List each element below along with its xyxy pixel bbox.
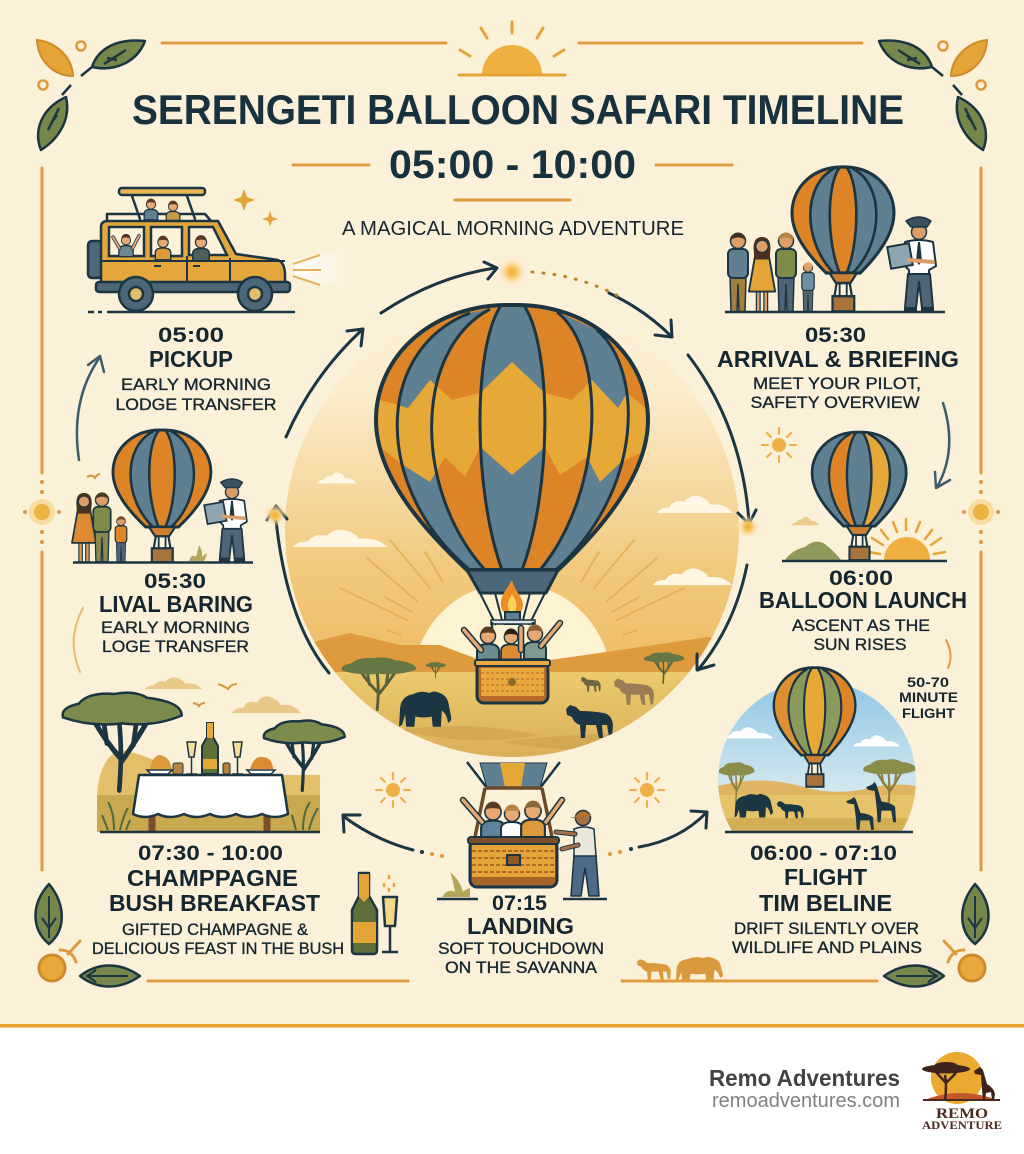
flight duration note: 50-70 [907,674,949,690]
corner ornament: bottom right [884,884,989,986]
sun [420,590,606,672]
balloon [113,428,215,562]
step text: 05:30 second briefing: 05:30 [144,570,206,593]
ground and grass [73,561,253,564]
roof canopy and rails [107,188,211,221]
bush [785,542,841,560]
step text: 07:15 landing: ON THE SAVANNA [445,958,598,977]
step text: 05:00 pickup: LODGE TRANSFER [116,395,276,414]
step text: champagne bush breakfast [92,842,344,958]
window passengers [113,234,209,261]
illustration: arrival and briefing [725,165,945,312]
grass [442,872,470,897]
sun rays [869,519,945,554]
step text: 05:00 pickup: PICKUP [149,346,233,372]
sky [718,680,916,795]
step text: champagne bush breakfast: 07:30 - 10:00 [138,842,283,865]
sky [285,360,739,672]
grass and ground line [100,831,320,833]
title: SERENGETI BALLOON SAFARI TIMELINE [132,86,904,133]
trees [719,759,917,805]
family group [72,492,127,562]
website: remoadventures.com [712,1090,900,1112]
step text: 07:15 landing: LANDING [467,913,574,939]
icon: champagne bottle and glass [352,873,398,954]
decorative frame: lines and dots [42,43,981,981]
footer band [0,1027,1024,1154]
icon: small sun left of landing [376,773,410,807]
wicker basket [475,660,550,703]
footer rule [0,1024,1024,1028]
road line [88,311,295,313]
step text: champagne bush breakfast: BUSH BREAKFAST [109,890,320,916]
step text: 05:30 second briefing: LOGE TRANSFER [102,637,249,656]
illustration: balloon launch [782,430,947,561]
small side arrows [77,356,950,488]
birds [193,684,237,706]
step text: 05:30 second briefing [99,570,253,656]
hills [718,780,916,800]
step text: champagne bush breakfast: DELICIOUS FEAST IN THE BUSH [92,939,344,958]
guests group [728,232,814,312]
passengers [463,800,562,839]
bumper [96,282,290,292]
jeep body [101,221,285,286]
clouds [722,727,900,746]
ground shadows [404,726,612,750]
central scene: balloon over the savanna [285,303,740,781]
step text: 05:30 arrival and briefing: ARRIVAL & BRIEFING [717,346,959,372]
balloon [812,430,910,560]
step text: champagne bush breakfast: GIFTED CHAMPAGNE & [122,920,309,939]
wheels [119,277,272,311]
step text: 06:00 balloon launch: ASCENT AS THE [792,616,930,635]
icon: small sun right of landing [630,773,664,807]
step text: 07:15 landing: SOFT TOUCHDOWN [438,939,604,958]
dotted connectors and glowing timeline markers [23,257,1000,858]
step text: 06:00 balloon launch: SUN RISES [814,635,906,654]
step text: 05:30 arrival and briefing [717,324,959,412]
step text: 07:15 landing [438,892,604,977]
step text: 05:30 arrival and briefing: SAFETY OVERVIEW [750,393,920,412]
acacia left [63,693,182,790]
step text: 05:30 arrival and briefing: 05:30 [805,324,866,347]
table legs [152,810,267,832]
cloud [792,517,819,525]
step text: flight timing: 06:00 - 07:10 [750,842,897,865]
tablecloth [133,775,288,817]
flight duration note: FLIGHT [902,705,955,721]
timeline arrows: central loop [267,262,756,850]
ropes and burner [480,580,545,660]
flight duration note [899,640,958,721]
ground crew [556,810,599,896]
hills [300,633,740,680]
balloon [774,666,859,787]
pilot [204,479,247,562]
ground [718,795,916,832]
icon: gold animals on bottom line [637,957,723,980]
step text: 05:00 pickup: EARLY MORNING [121,375,271,394]
step text: 05:00 pickup: 05:00 [158,324,224,347]
clouds [293,472,733,585]
passengers waving [464,623,560,661]
balloon skirt [467,762,560,837]
time range heading: 05:00 - 10:00 [389,143,636,187]
ground [335,672,689,757]
icon: small sun by launch [762,428,796,462]
step text: 06:00 balloon launch: BALLOON LAUNCH [759,587,967,613]
corner ornament: top left [37,40,145,150]
spare tyre [88,241,102,278]
balloon [792,165,898,311]
grass tuft [189,545,207,561]
grass tufts [102,802,318,830]
acacia right [264,720,345,790]
bird [87,474,100,478]
step text: flight timing: DRIFT SILENTLY OVER [734,919,919,938]
pilot with clipboard [887,217,936,312]
step text: 05:00 pickup [116,324,276,414]
windows [109,227,227,256]
step text: champagne bush breakfast: CHAMPPAGNE [127,865,298,891]
roof passengers [144,198,180,222]
step text: 06:00 balloon launch [759,567,967,654]
ground line [782,560,947,562]
basket [468,837,559,887]
step text: 06:00 balloon launch: 06:00 [829,567,893,590]
sunrise [884,537,930,560]
logo: ADVENTURE [922,1118,1002,1132]
illustration: flight over savanna [718,666,917,832]
large balloon envelope [360,305,660,593]
ground lines [437,898,607,900]
icon: safari jeep with passengers [88,188,350,312]
trees [342,652,684,710]
doors and trim [101,256,285,286]
flight duration note: MINUTE [899,689,958,705]
illustration: landing [437,762,607,899]
headlight beam [294,248,350,290]
brand name: Remo Adventures [709,1065,900,1091]
clouds [145,677,301,713]
footer [0,1024,1024,1154]
logo: REMO [936,1106,988,1122]
ground line [725,831,913,833]
illustration: bush breakfast [63,677,345,832]
savanna foreground [97,795,320,832]
ground line [725,311,945,313]
step text: flight timing: WILDLIFE AND PLAINS [732,938,922,957]
sun rays [340,540,684,635]
corner ornament: top right [879,40,987,150]
savanna backdrop [97,750,320,832]
wildlife [734,782,896,830]
step text: 05:30 arrival and briefing: MEET YOUR PILOT, [753,374,921,393]
logo [922,1052,1002,1132]
step text: 07:15 landing: 07:15 [492,892,547,915]
sparkles [233,189,278,227]
step text: 05:30 second briefing: EARLY MORNING [101,618,250,637]
illustration: second briefing scene [72,428,253,562]
food and champagne on table [147,723,275,774]
corner ornament: bottom left [35,884,140,986]
step text: 05:30 second briefing: LIVAL BARING [99,591,253,617]
wildlife [399,677,654,738]
step text: flight timing: TIM BELINE [759,890,892,916]
step text: flight timing [732,842,922,957]
subtitle: A MAGICAL MORNING ADVENTURE [342,218,684,240]
decorative bracket arc [74,608,83,672]
step text: flight timing: FLIGHT [784,864,867,890]
icon: rising sun at top [459,22,565,75]
